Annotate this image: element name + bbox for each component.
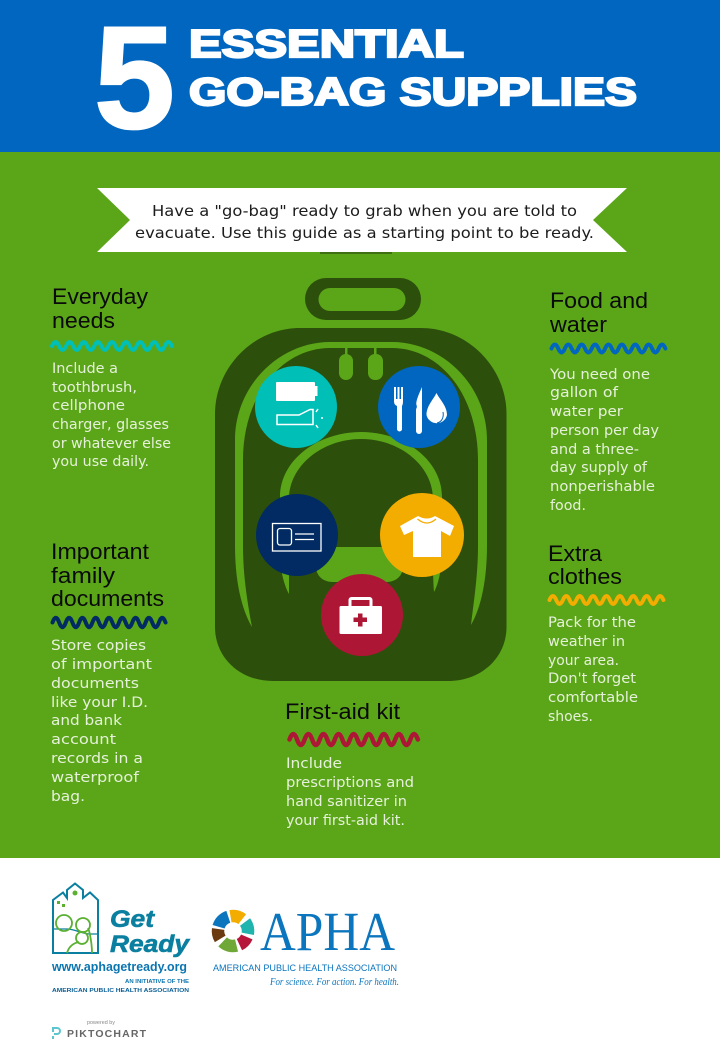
logo: Get Ready: Ready — [110, 931, 191, 958]
logo: Get Ready: Get — [110, 906, 155, 933]
section: everyday needs: you use daily. — [52, 454, 149, 470]
section: extra clothes: comfortable — [548, 690, 638, 706]
icon: fork, knife and water drop — [378, 366, 460, 448]
section: extra clothes: Extra — [548, 541, 603, 566]
logo: Piktochart credit — [53, 1020, 147, 1040]
logo: APHA: AMERICAN PUBLIC HEALTH ASSOCIATION — [213, 963, 397, 973]
section: food and water: You need one — [549, 367, 650, 383]
section: important family documents: records in a — [51, 751, 143, 767]
icon: first-aid kit — [321, 574, 403, 656]
section: extra clothes: shoes. — [548, 709, 593, 725]
section: important family documents: Store copies — [51, 638, 146, 654]
section: everyday needs — [52, 284, 172, 470]
section: food and water: Food and — [550, 288, 648, 313]
section: first-aid kit: First-aid kit — [285, 699, 400, 724]
section: everyday needs: needs — [52, 308, 115, 333]
logo: Get Ready: www.aphagetready.org — [51, 960, 187, 974]
section: important family documents: documents — [51, 586, 164, 611]
section: important family documents: bag. — [51, 789, 85, 805]
section: important family documents: of important — [51, 657, 153, 673]
intro banner — [97, 188, 627, 252]
green main panel — [0, 152, 720, 858]
logo: Get Ready: AMERICAN PUBLIC HEALTH ASSOCIATION — [52, 988, 189, 994]
logo: Piktochart credit: PIKTOCHART — [67, 1028, 147, 1040]
logo: Get Ready: AN INITIATIVE OF THE — [125, 979, 189, 985]
section: everyday needs: cellphone — [52, 398, 125, 414]
section: extra clothes: your area. — [548, 653, 619, 669]
section: food and water: water — [549, 312, 607, 337]
section: important family documents: and bank — [51, 713, 123, 729]
section: everyday needs: toothbrush, — [52, 380, 137, 396]
section: important family documents — [51, 539, 166, 805]
icon: battery and flashlight — [255, 366, 337, 448]
title: ESSENTIAL — [189, 23, 464, 66]
logo: APHA: For science. For action. For health. — [269, 977, 399, 988]
section: important family documents: documents — [51, 676, 139, 692]
section: everyday needs: charger, glasses — [52, 417, 169, 433]
section: everyday needs: Everyday — [52, 284, 148, 309]
section: food and water: and a three- — [550, 442, 639, 458]
section: food and water: gallon of — [550, 385, 619, 401]
section: food and water: person per day — [550, 423, 659, 439]
title — [94, 0, 637, 159]
section: food and water: nonperishable — [550, 479, 655, 495]
section: extra clothes: Don't forget — [548, 671, 637, 687]
section: food and water: water per — [550, 404, 623, 420]
logo: APHA: APHA — [260, 901, 395, 962]
section: first-aid kit: hand sanitizer in — [286, 794, 407, 810]
section: important family documents: account — [51, 732, 117, 748]
intro banner: Have a "go-bag" ready to grab when you are told to — [152, 202, 577, 220]
logo: APHA — [212, 901, 399, 988]
section: extra clothes: Pack for the — [548, 615, 636, 631]
icon: t-shirt — [380, 493, 464, 577]
logo: Piktochart credit: powered by — [87, 1020, 115, 1026]
section: important family documents: Important — [51, 539, 149, 564]
section: everyday needs: or whatever else — [52, 436, 171, 452]
section: important family documents: like your I.D. — [51, 695, 148, 711]
section: extra clothes — [548, 541, 663, 725]
section: first-aid kit — [285, 699, 418, 829]
section: first-aid kit: Include — [286, 756, 342, 772]
section: food and water: food. — [550, 498, 586, 514]
section: food and water: day supply of — [550, 460, 648, 476]
section: extra clothes: clothes — [548, 564, 622, 589]
title: GO-BAG SUPPLIES — [189, 71, 637, 114]
section: first-aid kit: prescriptions and — [286, 775, 414, 791]
header band — [0, 0, 720, 152]
section: first-aid kit: your first-aid kit. — [286, 813, 405, 829]
icon: ID card — [256, 494, 338, 576]
section: food and water — [549, 288, 665, 514]
intro banner: evacuate. Use this guide as a starting point to be ready. — [135, 224, 594, 242]
title: 5 — [94, 0, 175, 159]
section: important family documents: family — [51, 563, 115, 588]
section: extra clothes: weather in — [548, 634, 625, 650]
footer panel — [0, 858, 720, 1056]
backpack illustration — [215, 278, 506, 681]
logo: Get Ready — [51, 884, 191, 994]
section: everyday needs: Include a — [52, 361, 118, 377]
section: important family documents: waterproof — [51, 770, 140, 786]
